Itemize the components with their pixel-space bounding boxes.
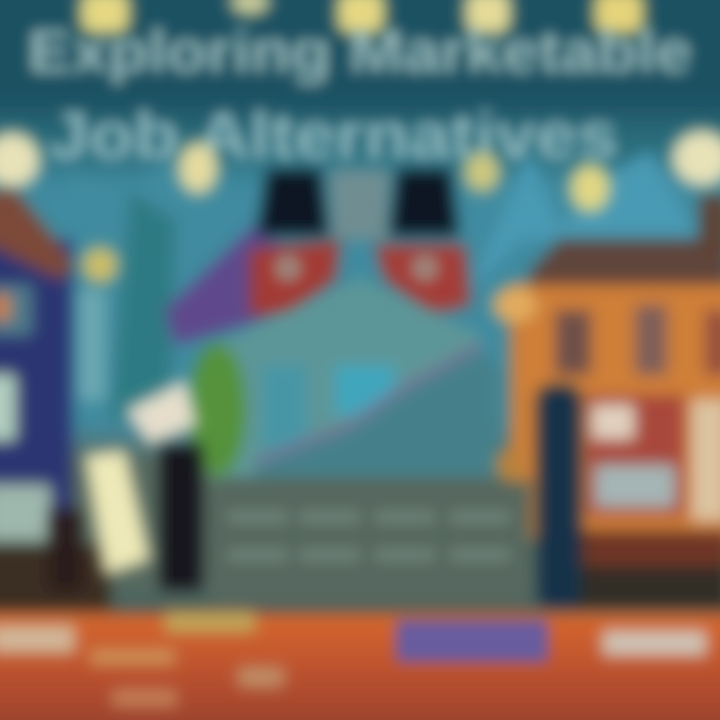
house left bbox=[0, 190, 110, 615]
person left bbox=[125, 344, 245, 590]
paper left bbox=[50, 450, 150, 590]
floor bbox=[0, 612, 720, 720]
hat left bbox=[258, 170, 328, 235]
table bbox=[212, 480, 530, 602]
white shirt bbox=[125, 380, 197, 445]
title bbox=[28, 18, 692, 172]
title: Exploring Marketable bbox=[28, 18, 692, 85]
red drape right bbox=[375, 245, 470, 315]
building right bbox=[510, 195, 720, 610]
hat right bbox=[390, 170, 458, 235]
title: Job Alternatives bbox=[48, 98, 618, 172]
table rows bbox=[228, 510, 510, 562]
trousers bbox=[160, 445, 202, 590]
drape and hats bbox=[165, 170, 470, 345]
papers on floor bbox=[0, 612, 707, 706]
building body bbox=[510, 195, 720, 610]
purple book bbox=[396, 620, 548, 662]
green coat bbox=[189, 344, 245, 476]
person right bbox=[493, 287, 581, 610]
faces bbox=[274, 254, 439, 282]
house body bbox=[0, 190, 110, 615]
string lights middle bbox=[0, 130, 720, 283]
red drape left bbox=[250, 240, 340, 315]
background mountains bbox=[30, 150, 700, 420]
chart panel bbox=[210, 278, 505, 480]
purple drape bbox=[165, 225, 295, 345]
hanging lights top bbox=[80, 0, 644, 34]
